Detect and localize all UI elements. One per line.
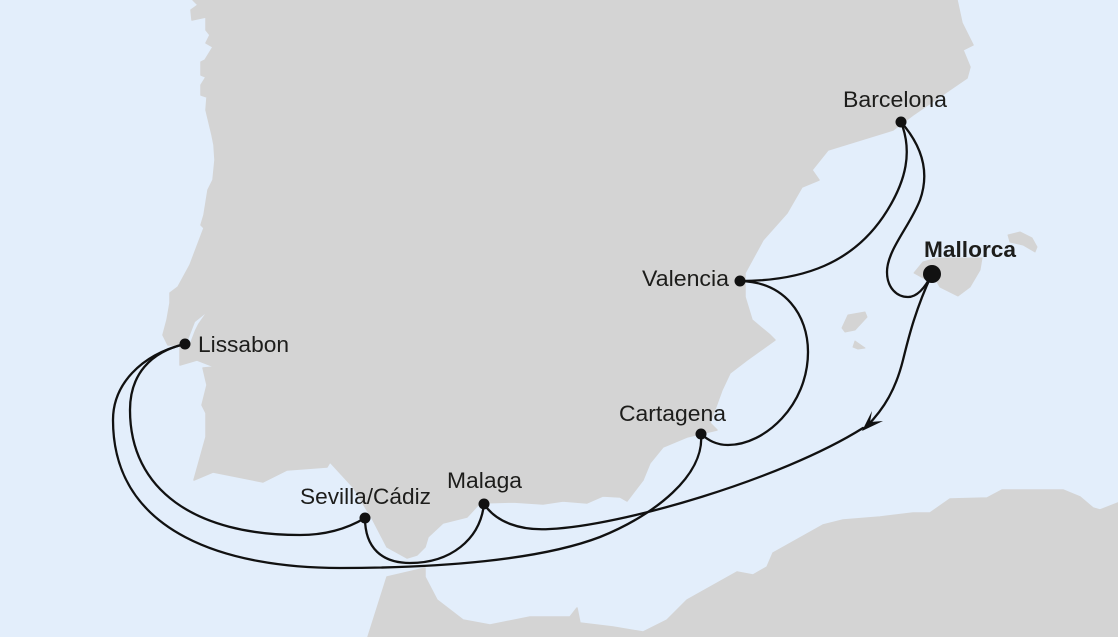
- land: Mallorca island: [914, 258, 982, 296]
- label: Sevilla/Cádiz: Sevilla/Cádiz: [300, 484, 431, 509]
- port marker: Barcelona: [896, 116, 906, 128]
- port marker: Valencia: [734, 276, 746, 286]
- port marker: Sevilla/Cádiz: [360, 512, 370, 524]
- port marker: Mallorca: [923, 265, 941, 283]
- land: North Africa: [368, 490, 1118, 637]
- label: Malaga: Malaga: [447, 468, 522, 493]
- land: Iberian Peninsula: [163, 0, 973, 558]
- land: Ibiza island: [842, 312, 867, 332]
- port marker: Lissabon: [180, 338, 190, 350]
- port marker: Cartagena: [696, 428, 706, 440]
- port marker: Malaga: [478, 498, 490, 510]
- route lines: [113, 122, 932, 568]
- label: Cartagena: Cartagena: [619, 401, 726, 426]
- land: Formentera island: [853, 341, 865, 349]
- land: Tagus inlet near Lisbon: [185, 314, 205, 344]
- icon: route arrowhead: [862, 411, 883, 431]
- label: Mallorca: Mallorca: [924, 237, 1016, 262]
- land: Menorca island: [1008, 232, 1037, 252]
- label: Barcelona: Barcelona: [843, 87, 947, 112]
- label: Lissabon: Lissabon: [198, 332, 289, 357]
- label: Valencia: Valencia: [642, 266, 729, 291]
